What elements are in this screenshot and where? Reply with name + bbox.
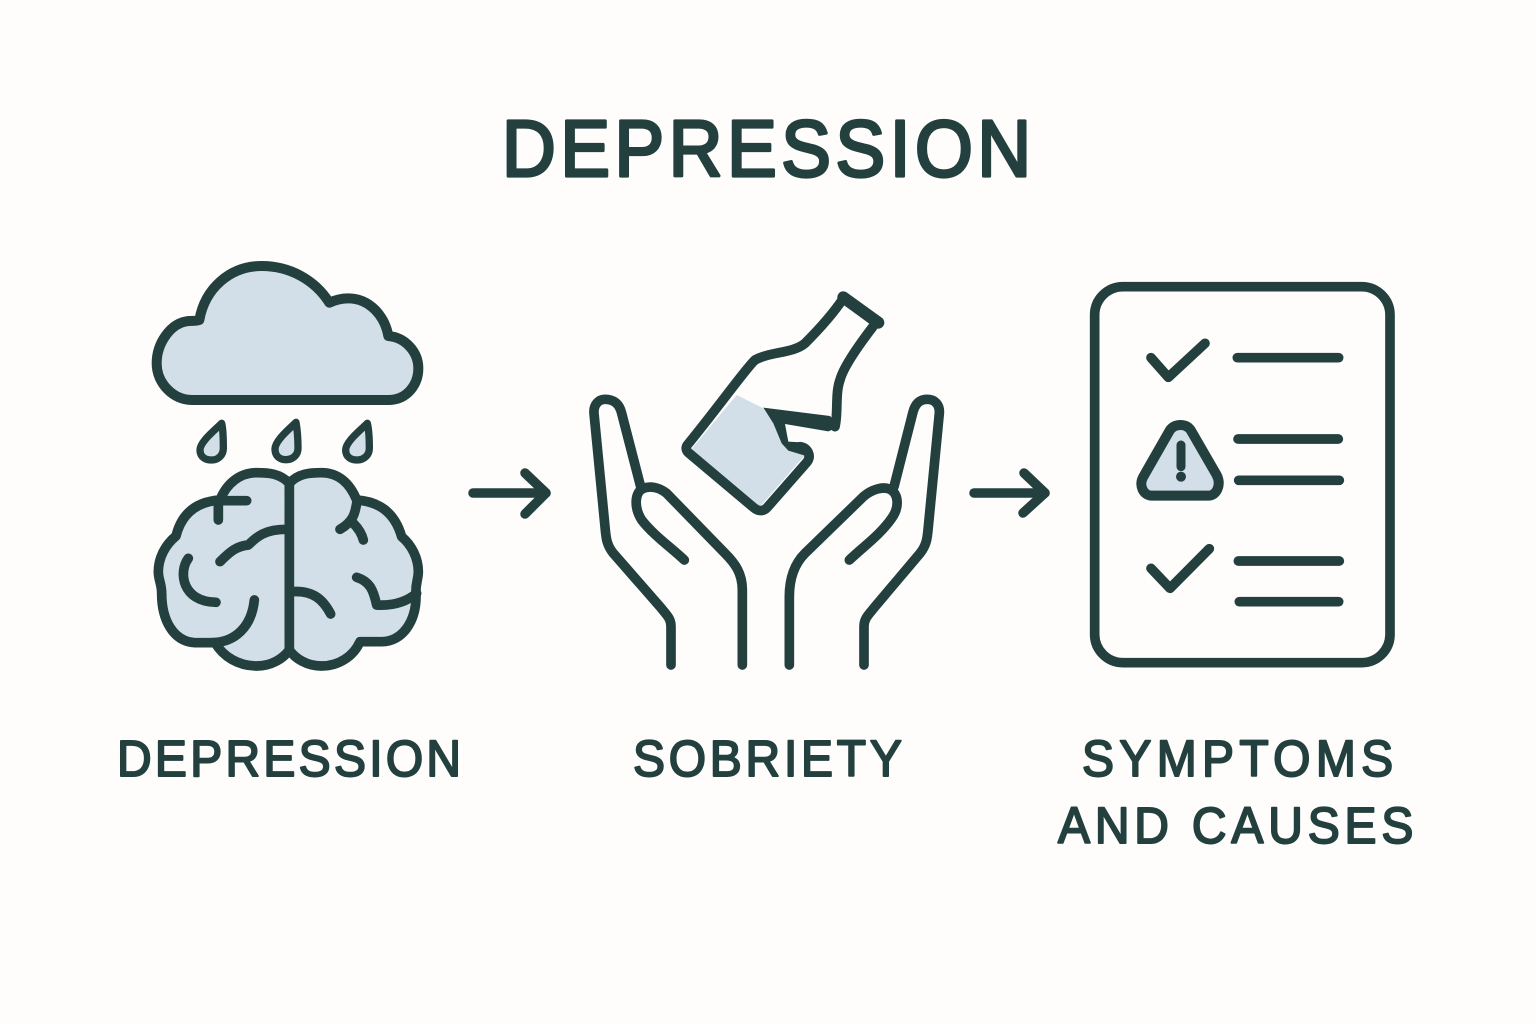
arrow: depression to sobriety	[473, 473, 546, 514]
cloud	[157, 266, 418, 400]
list lines	[1237, 358, 1339, 602]
label: symptoms and causes	[1058, 731, 1413, 854]
rain drops	[200, 422, 369, 460]
icon: rain cloud over brain	[157, 266, 418, 666]
check mark 2	[1151, 549, 1209, 588]
right hand	[789, 399, 939, 665]
bottle liquid	[691, 395, 805, 507]
document outline	[1095, 287, 1390, 663]
label: symptoms and causes: SYMPTOMS	[1082, 731, 1393, 787]
label: depression: DEPRESSION	[117, 731, 461, 787]
bottle outline	[686, 297, 878, 511]
icon: hands and bottle	[594, 297, 939, 665]
brain	[158, 473, 418, 666]
broken glass edge	[763, 408, 840, 457]
bottle neck cap	[843, 297, 878, 323]
warning triangle	[1141, 425, 1219, 496]
label: symptoms and causes: AND CAUSES	[1058, 798, 1413, 854]
check mark 1	[1151, 343, 1205, 377]
title: DEPRESSION	[502, 105, 1031, 194]
label: sobriety: SOBRIETY	[633, 731, 902, 787]
icon: checklist	[1095, 287, 1390, 663]
left hand	[594, 399, 742, 665]
arrow: sobriety to symptoms	[974, 473, 1045, 513]
